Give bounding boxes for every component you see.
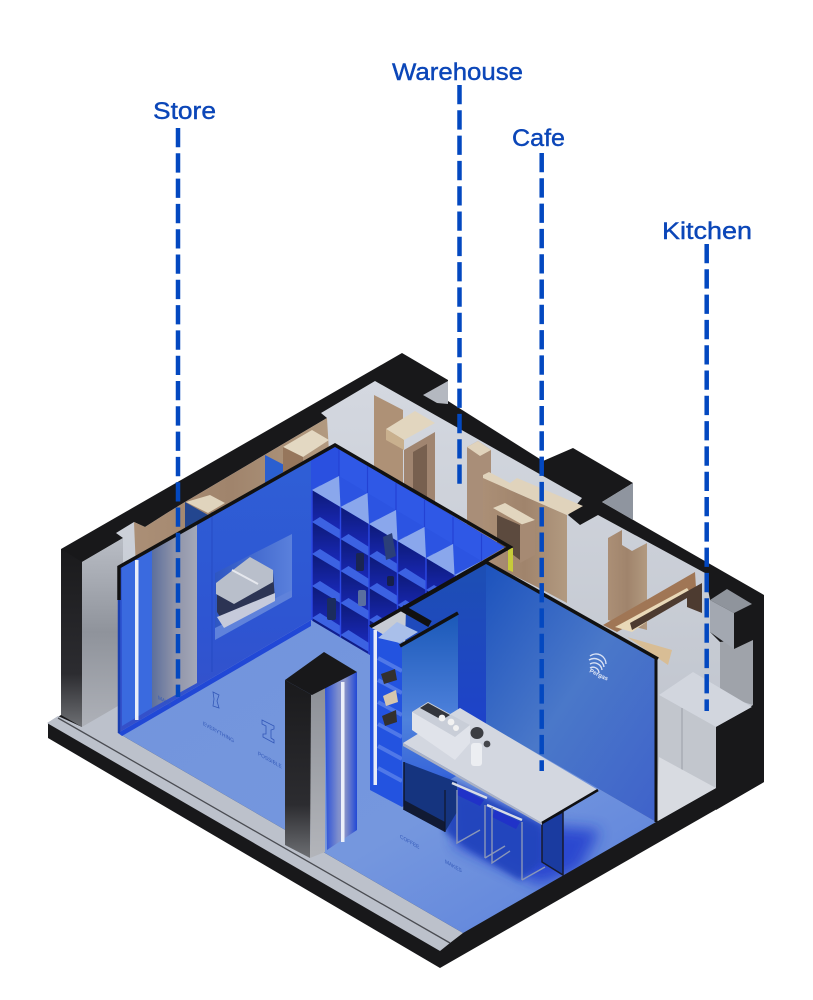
callout: warehouse: Warehouse (392, 59, 523, 86)
building shell silhouette (48, 353, 764, 968)
shelving wall (311, 447, 505, 655)
wood panelling: store back (134, 418, 329, 570)
left column: dark face (61, 549, 82, 727)
floor word: everything: EVERYTHING (203, 721, 234, 745)
outer concrete pier (423, 381, 448, 404)
wood joinery: cafe back (603, 530, 702, 665)
bar stool left (452, 783, 505, 858)
floor word: possible: POSSIBLE (258, 751, 282, 771)
floor shadow under counter (450, 785, 600, 885)
callout: store: Store (153, 98, 216, 125)
coffee machine (412, 702, 470, 760)
shelf products (327, 533, 396, 620)
counter leg panel (542, 812, 563, 875)
back walls (82, 381, 753, 822)
glass display case (404, 762, 457, 832)
service counter (403, 708, 598, 825)
outer concrete block face (602, 483, 633, 520)
glass word: make: MAKE (158, 695, 172, 709)
under-counter shade (445, 778, 542, 880)
callout: kitchen: Kitchen (662, 218, 752, 245)
callout: cafe: Cafe (512, 125, 565, 152)
cafe back wall (402, 562, 657, 822)
icon: chemex (213, 692, 219, 708)
slab front (47, 706, 463, 951)
icon: espresso machine (262, 720, 274, 743)
pillar (285, 652, 357, 858)
logo wordmark: Pergas (588, 668, 609, 683)
store wall with glass section (118, 458, 311, 736)
floor word: coffee: COFFEE (400, 834, 420, 851)
floor word: makes: MAKES (445, 859, 462, 875)
floor (118, 620, 656, 933)
logo on cafe wall (588, 654, 609, 683)
structural wall lines (119, 445, 658, 822)
wood joinery: warehouse (374, 395, 583, 603)
kitchen fittings (656, 589, 764, 822)
partition shelf column (370, 622, 418, 807)
coffee grinder (470, 727, 490, 766)
espresso machine niche (215, 534, 292, 640)
partition panel (400, 613, 458, 807)
floor graphics (158, 692, 462, 875)
left column: concrete face (82, 538, 123, 727)
isometric cutaway infographic (47, 62, 764, 968)
bar stool right (487, 805, 545, 880)
